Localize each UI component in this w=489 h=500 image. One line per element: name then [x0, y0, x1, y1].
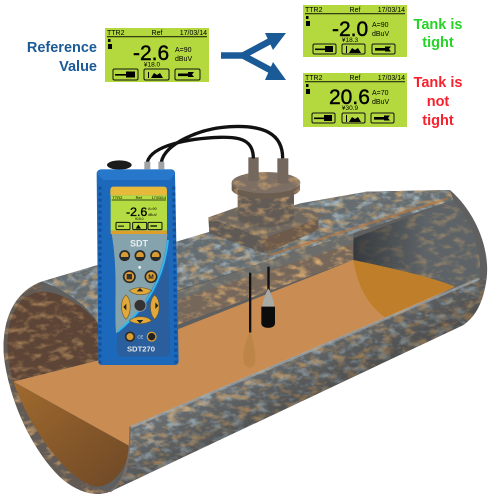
device screen: TTR2 — [112, 195, 123, 200]
LCD panel: not tight reading: A=70 — [372, 90, 389, 97]
LCD panel: not tight reading: 17/03/14 — [378, 75, 405, 82]
device screen: 17/03/14 — [152, 196, 166, 200]
mounting block — [208, 207, 327, 253]
label: Reference Value: Value — [59, 59, 97, 75]
tank interior left end — [8, 292, 98, 382]
tank inner back wall — [173, 230, 357, 327]
LCD panel: reference reading: TTR2 — [107, 30, 125, 37]
verdict: Tank is tight: tight — [422, 35, 454, 51]
LCD panel: tight reading: A=90 — [372, 22, 389, 29]
device screen: -2.6 — [126, 205, 147, 219]
tank front shell — [107, 273, 489, 497]
flange cylinder — [232, 172, 300, 227]
LCD panel: not tight reading: 20.6 — [329, 86, 370, 109]
LCD panel: not tight reading: dBuV — [372, 99, 389, 106]
SDT logo: SDT — [130, 239, 148, 249]
tank neck, flange and connectors — [97, 126, 327, 367]
device screen: A=90 — [148, 207, 157, 211]
LCD panel: tight reading — [303, 5, 407, 57]
device screen: ¥18.0 — [135, 217, 144, 221]
tank left end below liquid — [13, 382, 129, 487]
LCD panel: reference reading: -2.6 — [133, 42, 169, 65]
label: Reference Value — [27, 40, 97, 75]
handheld SDT270 device: CE — [137, 334, 143, 339]
device screen — [110, 187, 167, 234]
device screen: dBuV — [148, 213, 158, 217]
LCD panel: tight reading: Ref — [350, 7, 360, 14]
verdict: Tank is tight — [414, 17, 462, 51]
LCD panel: not tight reading — [303, 73, 407, 127]
LCD panel: tight reading: -2.0 — [332, 18, 368, 41]
flange rust texture — [208, 172, 318, 254]
rusty tank cutaway — [0, 187, 489, 497]
liquid surface — [13, 260, 455, 446]
LCD panel: tight reading: dBuV — [372, 31, 389, 38]
cable connectors — [144, 162, 164, 169]
cables — [147, 126, 283, 162]
LCD panel: tight reading: TTR2 — [305, 7, 323, 14]
device screen: Ref — [136, 195, 143, 200]
tank upper shell — [33, 187, 457, 327]
arrow: forking result arrow — [221, 33, 286, 80]
verdict: Tank is not tight: Tank is — [414, 75, 462, 91]
verdict: Tank is not tight — [414, 75, 462, 129]
tank interior right end — [354, 204, 480, 286]
LCD panel: reference reading: Ref — [152, 30, 162, 37]
LCD panel: tight reading: ¥18.3 — [342, 37, 359, 44]
function keys — [120, 251, 160, 341]
SDT270 model name: SDT270 — [127, 345, 155, 354]
probe stubs — [248, 157, 288, 183]
LCD panel: reference reading: dBuV — [175, 56, 192, 63]
LCD panel: reference reading — [105, 28, 209, 82]
probes into the tank — [243, 267, 275, 367]
verdict: Tank is not tight: tight — [422, 113, 454, 129]
LCD panel: tight reading: 17/03/14 — [378, 7, 405, 14]
arrow keypad — [121, 288, 159, 324]
handheld SDT270 device — [97, 160, 179, 365]
label: Reference Value: Reference — [27, 40, 97, 56]
verdict: Tank is not tight: not — [427, 94, 449, 110]
LCD panel: not tight reading: Ref — [350, 75, 360, 82]
LCD panel: reference reading: 17/03/14 — [180, 30, 207, 37]
device keypad panel — [112, 234, 167, 333]
LCD panel: reference reading: ¥18.0 — [144, 62, 161, 68]
LCD panel: reference reading: A=90 — [175, 47, 192, 54]
handheld SDT270 device: M — [148, 274, 154, 281]
LCD panel: not tight reading: ¥30.9 — [342, 105, 359, 112]
verdict: Tank is tight: Tank is — [414, 17, 462, 33]
LCD panel: not tight reading: TTR2 — [305, 75, 323, 82]
